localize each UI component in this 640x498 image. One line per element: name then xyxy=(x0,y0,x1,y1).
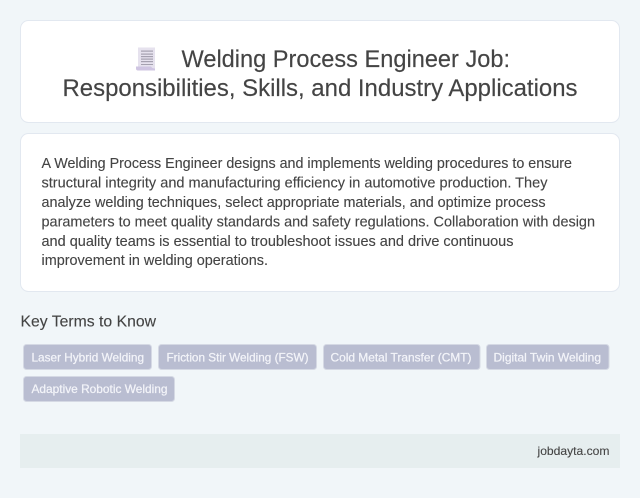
description text: analyze welding techniques, select appropriate materials, and optimize process xyxy=(42,195,546,211)
chip: adaptive robotic welding: Adaptive Robotic Welding xyxy=(32,382,168,396)
chip: cold metal transfer xyxy=(324,344,480,370)
description text: improvement in welding operations. xyxy=(42,253,268,269)
footer site name: jobdayta.com xyxy=(536,444,610,458)
chip: cold metal transfer: Cold Metal Transfer (CMT) xyxy=(330,350,472,364)
panel: description card xyxy=(20,134,620,292)
chip: friction stir welding xyxy=(158,344,316,370)
description text: A Welding Process Engineer designs and implements welding procedures to ensure xyxy=(42,156,572,172)
description text: structural integrity and manufacturing efficiency in automotive production. They xyxy=(42,176,548,192)
description text xyxy=(42,156,595,269)
chip: laser hybrid welding: Laser Hybrid Welding xyxy=(32,350,144,364)
title xyxy=(62,46,578,102)
chip: adaptive robotic welding xyxy=(24,376,174,402)
key term chips xyxy=(24,344,609,402)
description text: parameters to meet quality standards and safety regulations. Collaboration with design xyxy=(42,214,595,230)
footer bar xyxy=(20,434,620,468)
panel: title card xyxy=(20,20,620,122)
icon: document scroll xyxy=(136,48,155,70)
chip: digital twin welding: Digital Twin Welding xyxy=(494,350,601,364)
chip: laser hybrid welding xyxy=(24,344,152,370)
chip: friction stir welding: Friction Stir Welding (FSW) xyxy=(166,350,308,364)
chip: digital twin welding xyxy=(486,344,609,370)
description text: and quality teams is essential to troubleshoot issues and drive continuous xyxy=(42,234,514,250)
heading: key terms: Key Terms to Know xyxy=(20,314,156,330)
title: Welding Process Engineer Job: xyxy=(182,46,510,73)
title: Responsibilities, Skills, and Industry Applications xyxy=(62,75,578,102)
